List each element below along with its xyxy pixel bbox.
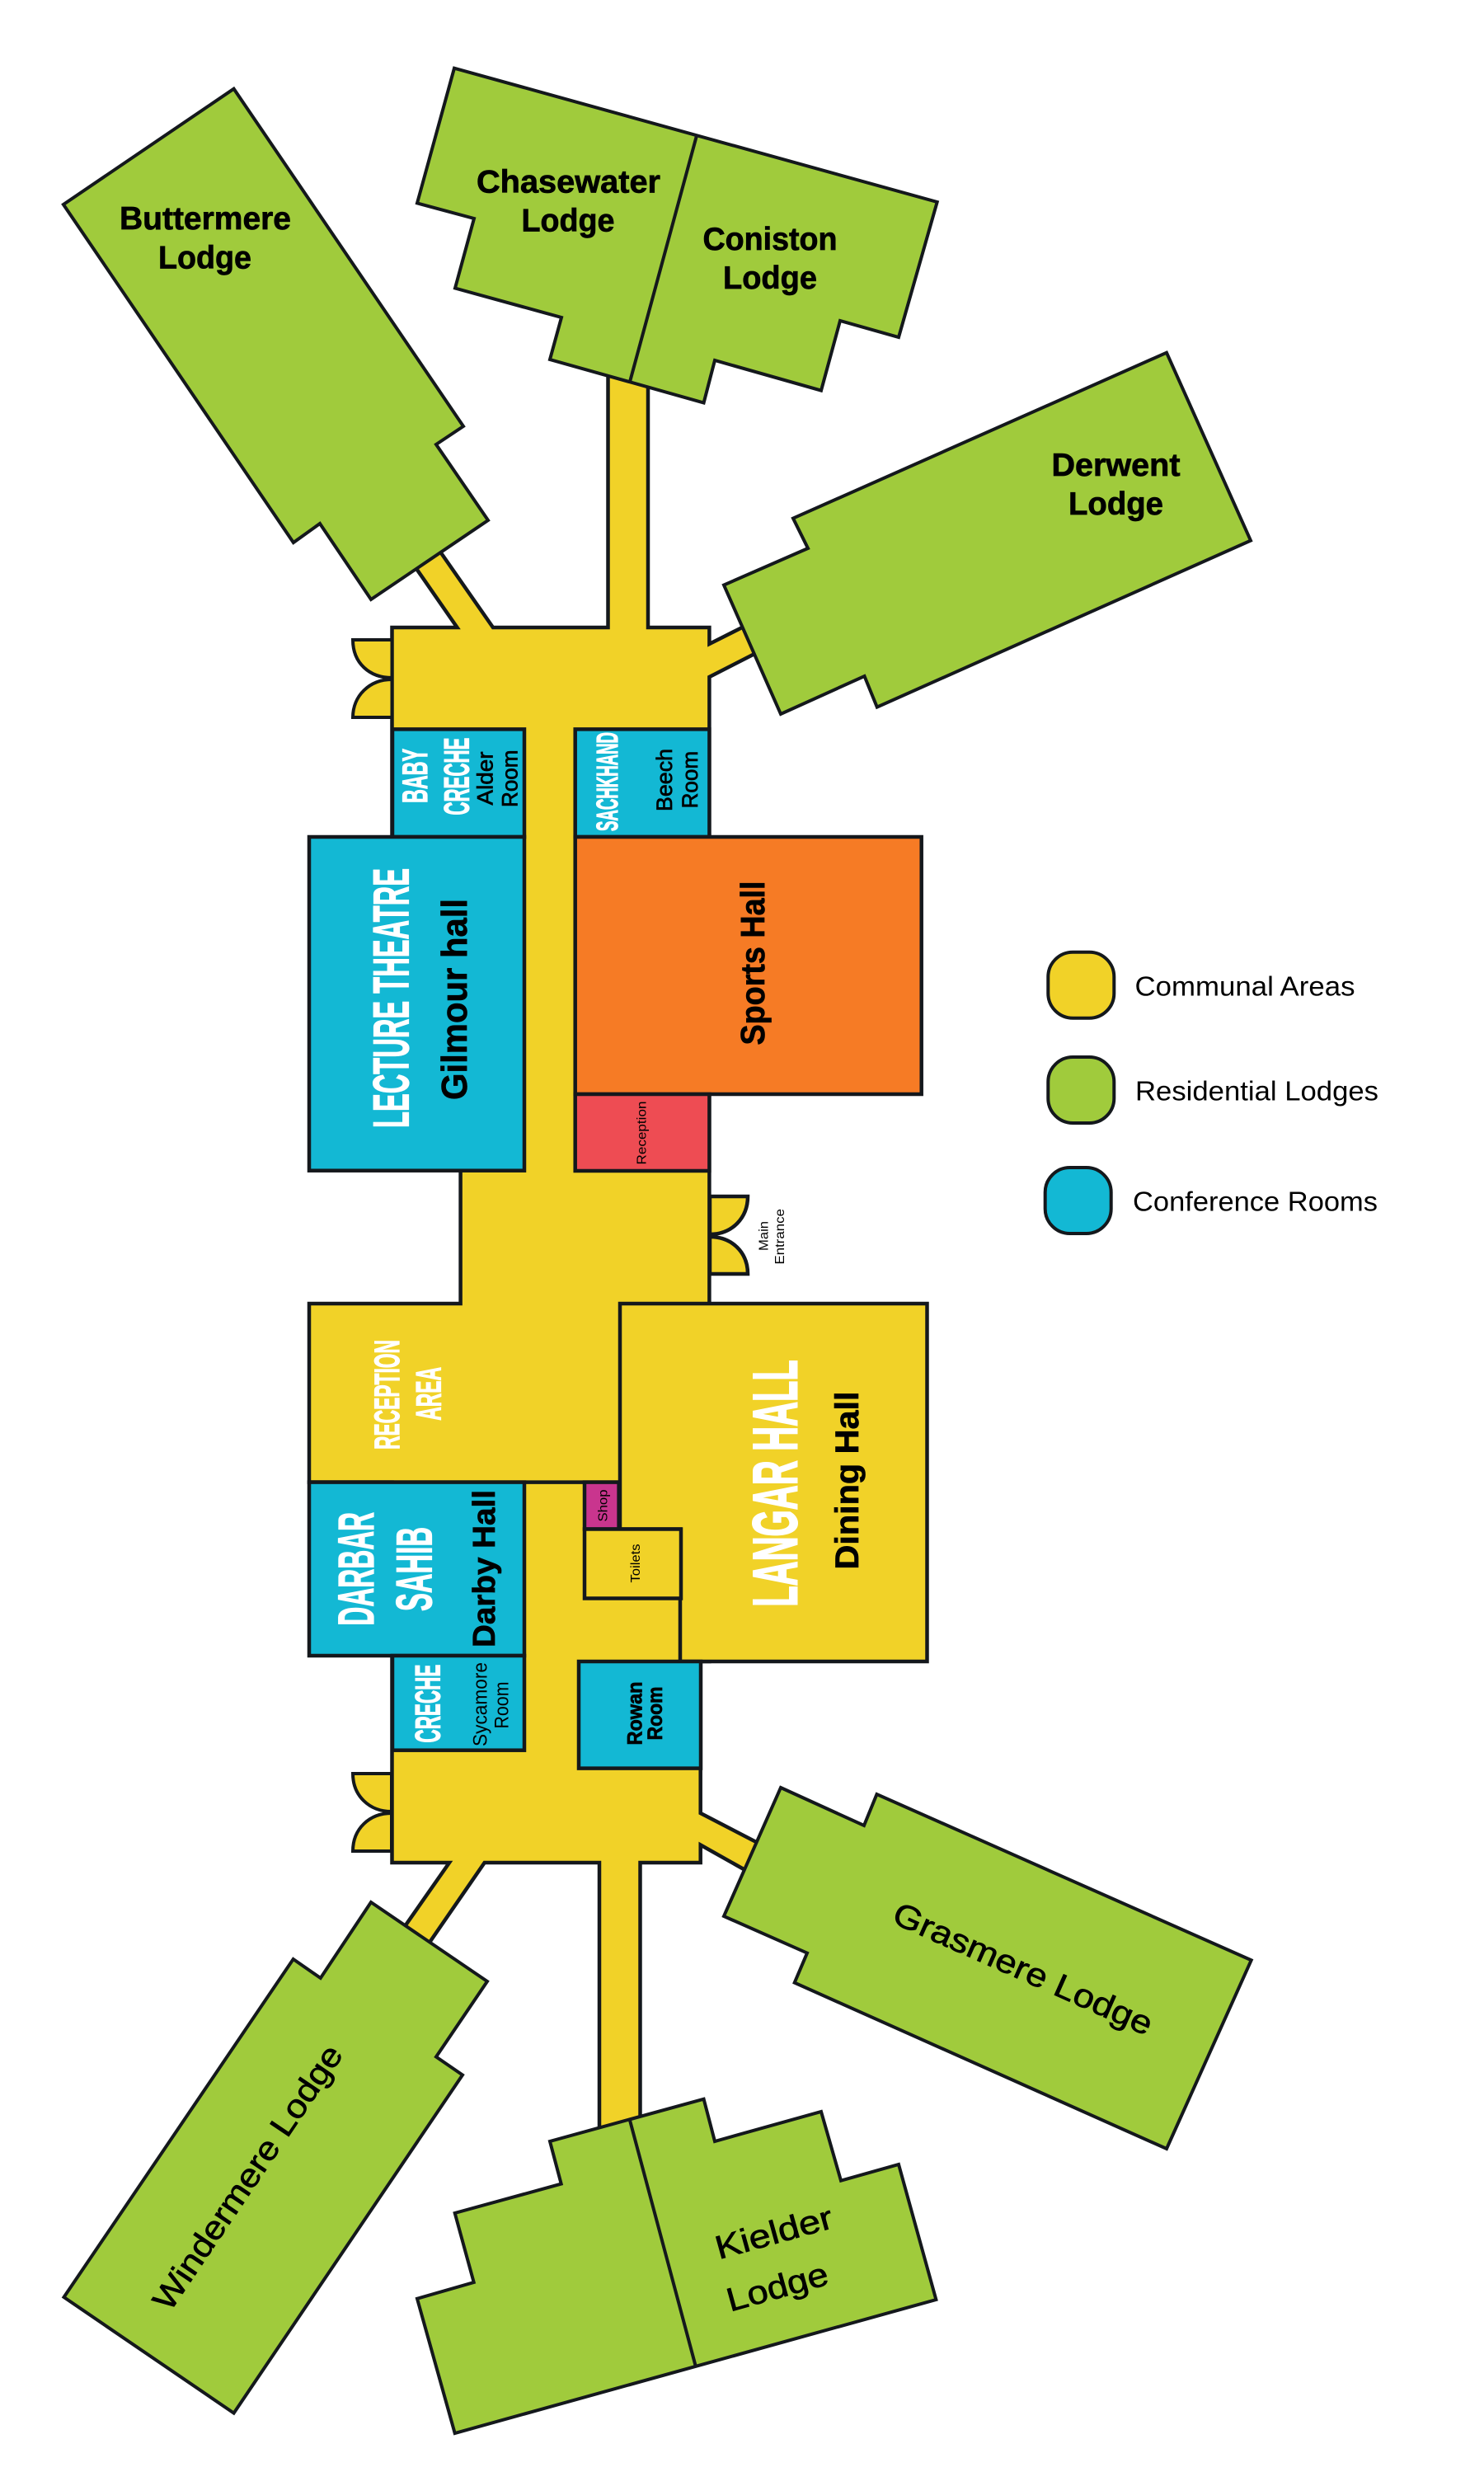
room: Baby Creche, Alder Room: CRECHE: [438, 738, 477, 815]
door: main entrance: [710, 1196, 748, 1274]
room: Creche, Sycamore Room: CRECHE: [409, 1665, 448, 1743]
legend: Residential Lodges: [1048, 1057, 1378, 1123]
legend: [1045, 952, 1378, 1234]
lodge: Buttermere: [63, 89, 488, 599]
lodge: Derwent: [724, 353, 1251, 714]
room: Lecture Theatre, Gilmour hall: [309, 837, 524, 1171]
lodge: Chasewater and Coniston: Coniston: [702, 222, 838, 257]
lodge: Windermere: [64, 1902, 487, 2413]
label: Main Entrance: [757, 1209, 787, 1265]
legend: Conference Rooms: [1045, 1168, 1378, 1234]
room: Baby Creche, Alder Room: Alder: [472, 751, 497, 805]
room: Sachkhand, Beech Room: SACHKHAND: [590, 732, 624, 831]
room: Lecture Theatre, Gilmour hall: LECTURE THEATRE: [363, 868, 419, 1128]
room: Darbar Sahib, Darby Hall: [309, 1483, 524, 1656]
lodge: Kielder: Lodge: [722, 2256, 833, 2319]
label: Main Entrance: Main: [757, 1221, 772, 1251]
lodge: Derwent: Lodge: [1068, 486, 1163, 522]
label: Reception Area: RECEPTION: [368, 1340, 407, 1450]
room: Sachkhand, Beech Room: Room: [678, 751, 702, 808]
room: Shop: [585, 1483, 619, 1529]
lodge: Kielder: Kielder: [711, 2200, 837, 2267]
legend: Residential Lodges: Residential Lodges: [1135, 1075, 1378, 1106]
legend: Communal Areas: Communal Areas: [1134, 971, 1355, 1002]
lodge: Chasewater and Coniston: Lodge: [723, 261, 817, 296]
room: Rowan Room: Rowan: [623, 1682, 646, 1745]
room: Rowan Room: [579, 1661, 701, 1769]
room: Darbar Sahib, Darby Hall: SAHIB: [387, 1527, 443, 1611]
room: Baby Creche, Alder Room: BABY: [396, 749, 435, 803]
door: bottom left entrance: [353, 1774, 392, 1851]
room: Creche, Sycamore Room: [392, 1656, 524, 1751]
room: Sachkhand, Beech Room: Beech: [652, 749, 677, 811]
lodge: Derwent: Derwent: [1052, 448, 1181, 483]
door: top left entrance: [353, 640, 392, 717]
room: Creche, Sycamore Room: Sycamore: [470, 1662, 491, 1746]
room: Shop: Shop: [596, 1489, 610, 1522]
room: Baby Creche, Alder Room: Room: [498, 750, 523, 807]
legend: Communal Areas: [1048, 952, 1355, 1018]
lodge: Chasewater and Coniston: [417, 68, 937, 402]
room: Sports Hall: [575, 837, 922, 1094]
room: Lecture Theatre, Gilmour hall: Gilmour hall: [434, 899, 475, 1100]
lodge: Kielder: [417, 2099, 936, 2433]
label: Main Entrance: Entrance: [773, 1209, 787, 1265]
room: Reception: Reception: [635, 1102, 650, 1164]
room: Sports Hall: Sports Hall: [734, 881, 772, 1046]
room: Toilets: [585, 1529, 681, 1598]
label: Reception Area: [309, 1340, 620, 1483]
room: Sachkhand, Beech Room: [575, 729, 709, 837]
room: Langar Hall, Dining Hall: LANGAR HALL: [741, 1360, 811, 1607]
room: Toilets: Toilets: [629, 1544, 643, 1583]
room: Langar Hall, Dining Hall: [620, 1304, 927, 1661]
lodge: Buttermere: Lodge: [158, 241, 251, 275]
lodge: Buttermere: Buttermere: [120, 201, 291, 237]
lodge: Windermere: Windermere Lodge: [146, 2038, 350, 2317]
room: Baby Creche, Alder Room: [392, 729, 524, 837]
room: Langar Hall, Dining Hall: Dining Hall: [829, 1391, 866, 1570]
communal corridors and main body: [309, 363, 763, 2144]
legend: Conference Rooms: Conference Rooms: [1133, 1186, 1378, 1216]
room: Darbar Sahib, Darby Hall: Darby Hall: [467, 1490, 502, 1647]
room: Rowan Room: Room: [644, 1687, 667, 1740]
lodge: Chasewater and Coniston: Lodge: [521, 204, 615, 239]
lodge: Chasewater and Coniston: Chasewater: [477, 165, 660, 200]
lodge: Grasmere: Grasmere Lodge: [887, 1896, 1158, 2043]
room: Reception: [575, 1094, 709, 1171]
room: Creche, Sycamore Room: Room: [491, 1682, 513, 1728]
room: Darbar Sahib, Darby Hall: DARBAR: [328, 1512, 384, 1626]
label: Reception Area: AREA: [410, 1367, 449, 1421]
lodge: Grasmere: [724, 1788, 1252, 2149]
